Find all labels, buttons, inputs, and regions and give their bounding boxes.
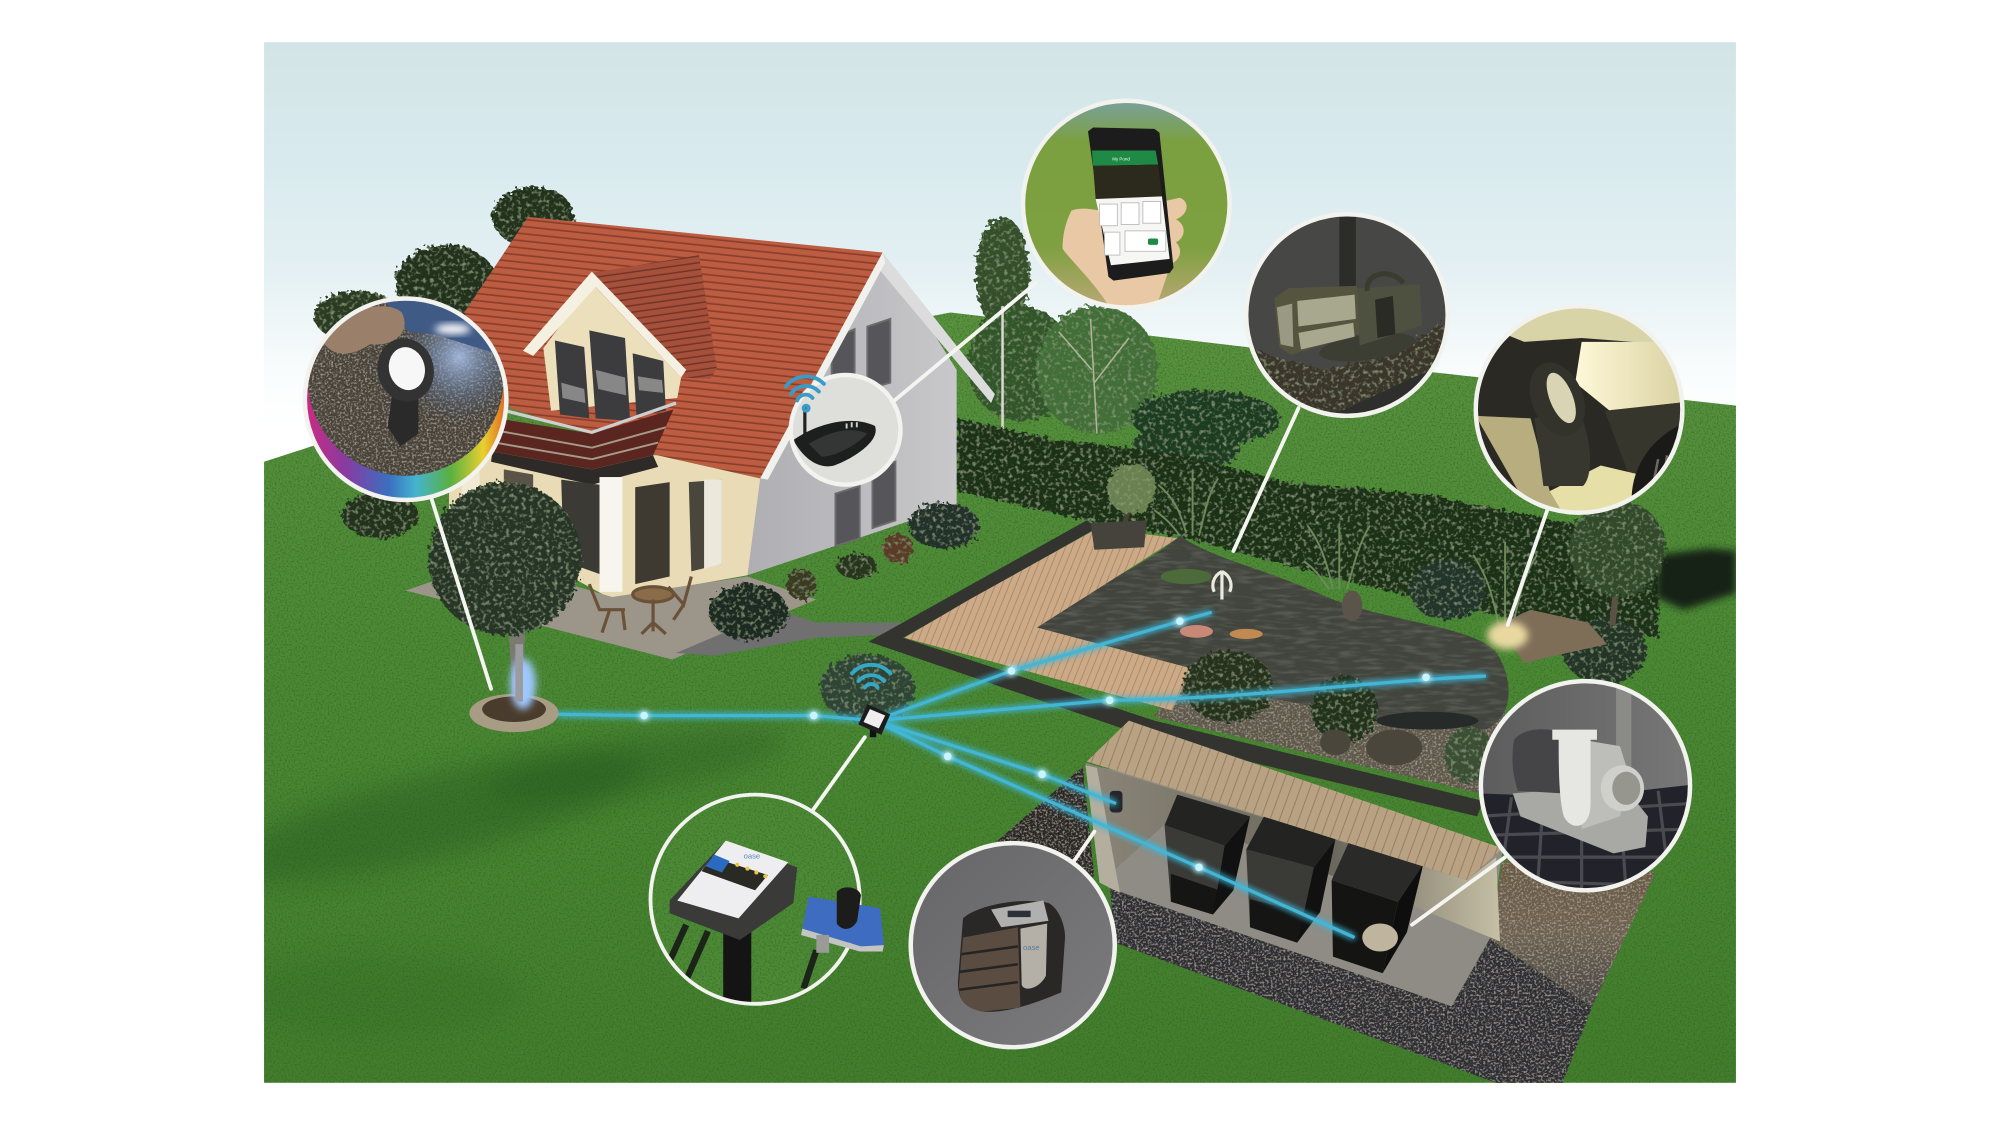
left planted shrub behind tree: [342, 492, 418, 538]
pond bushes and rocks: [1184, 559, 1647, 783]
callout: router: [788, 372, 903, 487]
spotlight head: [371, 332, 441, 408]
pond plants: [1154, 472, 1537, 625]
water surface: [1505, 304, 1665, 344]
rocks: [1320, 591, 1478, 765]
lawn: [213, 312, 1736, 1083]
lit wall: [1605, 402, 1688, 510]
callout: filter pump: [1477, 676, 1694, 895]
callout: outdoor controller: [651, 795, 884, 1008]
phone body: [1088, 128, 1173, 281]
spotlight lens: [1541, 369, 1582, 427]
spotlight stand: [388, 389, 418, 446]
sky: [264, 42, 1736, 364]
phone screen: controls: [1096, 196, 1170, 265]
wall unit in pit: [1110, 791, 1122, 812]
dormer fascia: [523, 272, 686, 378]
dormer roof: [592, 255, 717, 379]
dark path border: [869, 520, 1483, 816]
phone screen: photo: [1093, 165, 1162, 199]
riser pipe: [1339, 212, 1356, 288]
app switch: [1148, 239, 1158, 245]
network light lines: [557, 612, 1486, 938]
balcony: [491, 403, 676, 485]
small pump in filter: [1362, 923, 1398, 952]
filter boxes: [1165, 795, 1423, 973]
spotlight lens: [384, 343, 429, 394]
network nodes: [640, 617, 1430, 871]
ribbed side: [959, 927, 1020, 1011]
outlet pipe: [1601, 765, 1644, 811]
rear pipe: [1616, 676, 1631, 772]
grille housing: [1274, 286, 1360, 355]
window reflections: [561, 370, 663, 403]
spotlight ring: [1519, 354, 1595, 444]
grid floor: [1477, 784, 1694, 895]
right tree: [1569, 500, 1666, 625]
socket mount: [801, 887, 884, 953]
stone wall and lit spot: [1487, 610, 1607, 663]
garden furniture: [589, 577, 691, 634]
logo: oase: [1023, 943, 1040, 952]
house: [449, 217, 995, 599]
filter pit soil: [1490, 861, 1656, 1008]
floor: [1327, 364, 1450, 418]
ground-floor windows and columns: [462, 459, 722, 592]
birch trees right of the house: [967, 217, 1158, 434]
plug: [837, 887, 861, 929]
spotlight stand: [1534, 411, 1590, 486]
rock: [319, 306, 405, 354]
pump base: [1318, 328, 1417, 366]
garden scene panel: [213, 42, 1736, 1083]
callout: fountain pump: [1244, 212, 1450, 418]
pit side wall: [1085, 765, 1120, 893]
motor: [1512, 729, 1562, 793]
top panel: [991, 901, 1048, 927]
hand: [1062, 198, 1187, 312]
koi fish: [1180, 625, 1263, 639]
excavated dirt: [996, 767, 1094, 878]
icon: router wifi: [786, 376, 824, 411]
controller body: [670, 841, 797, 940]
vertical pipe: [1552, 730, 1597, 826]
cables: [666, 925, 708, 989]
tree shadow on back lawn: [1131, 390, 1279, 472]
phone screen: header: [1092, 151, 1158, 166]
router body: [793, 421, 876, 466]
handle: [1367, 274, 1403, 291]
pit back wall: [1085, 763, 1500, 941]
display: [705, 855, 730, 872]
callout: control box: [908, 841, 1119, 1051]
blue background top: [383, 298, 508, 357]
pit wood roof: [1087, 721, 1503, 880]
central controller unit: [858, 704, 890, 737]
shrubs at the house: [709, 503, 980, 640]
dormer wall: [543, 283, 681, 411]
lit floor: [1476, 416, 1645, 513]
trees behind the house: [314, 186, 574, 342]
light beam: [1575, 342, 1688, 411]
logo: oase: [744, 851, 760, 860]
planter ring with light: [469, 644, 559, 732]
dormer windows: [555, 330, 666, 421]
pit floor: [1091, 765, 1503, 1006]
side upper windows: [832, 319, 895, 546]
terrace: [406, 576, 816, 660]
controller face: [677, 841, 788, 918]
right tree shadow: [1656, 548, 1736, 610]
pump base: [1513, 784, 1648, 853]
pond water: [1037, 536, 1509, 730]
gravel path: [676, 613, 903, 656]
phone screen: tiles: [1099, 202, 1166, 255]
control strip: [702, 857, 768, 890]
gable fascia: [880, 253, 995, 403]
walkway: [904, 528, 1191, 710]
bonsai: [1091, 463, 1156, 550]
pump in corner: [1632, 421, 1690, 513]
blue lit ground: [395, 293, 523, 421]
shadow wall side: [747, 253, 957, 575]
callout: garden spotlight with colour ring: [304, 279, 523, 503]
connector lines: [431, 283, 1547, 925]
cable: [816, 935, 829, 953]
antenna: [804, 406, 806, 446]
callout: smartphone app: [1020, 99, 1237, 312]
box body: [958, 901, 1065, 1012]
callout: pond spotlight: [1473, 304, 1690, 518]
wifi signal: [852, 665, 890, 688]
status lights: [735, 863, 767, 878]
front tree: [429, 482, 582, 699]
filter pit gravel: [1110, 885, 1592, 1083]
pole: [723, 931, 751, 1008]
housing: [1582, 740, 1630, 829]
pump motor: [1356, 284, 1422, 346]
wifi bush: [820, 654, 915, 723]
app title: My Pond: [1112, 157, 1130, 162]
pond gravel bed: [1154, 676, 1505, 793]
silver front strip: [1020, 923, 1047, 989]
fountain and lily pads: [1161, 569, 1231, 599]
front wall: [449, 446, 760, 599]
rocks: [1244, 319, 1450, 418]
hedge: [957, 418, 1658, 638]
main roof: [464, 217, 883, 478]
